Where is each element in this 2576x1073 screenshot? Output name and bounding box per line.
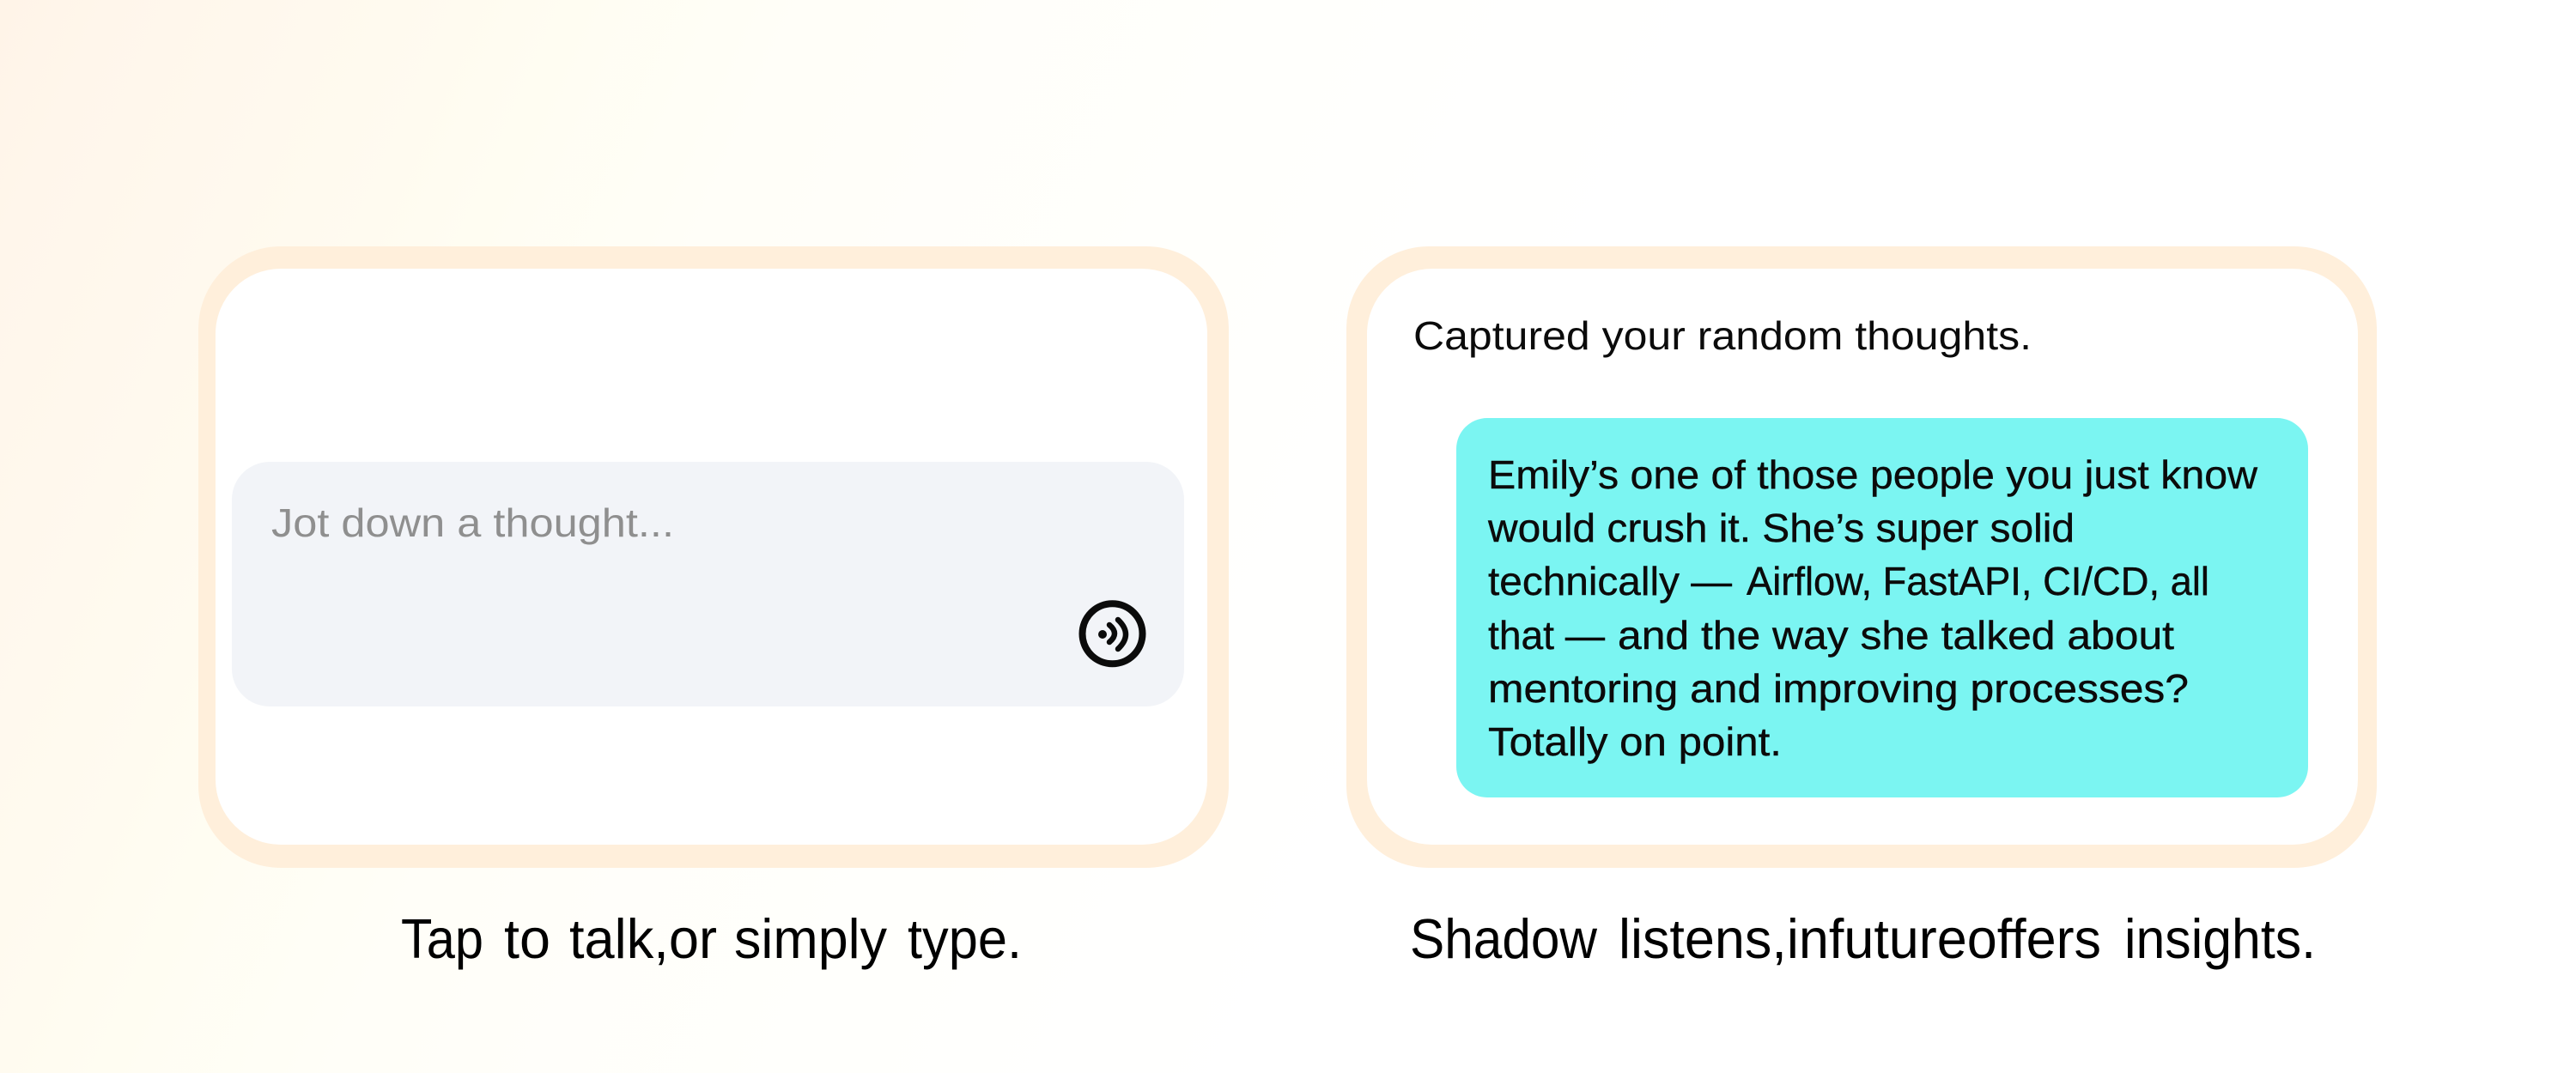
panel: transcript card [1346,246,2377,868]
input card frame [198,246,1229,868]
caption: input card: talk,or [569,907,717,970]
bubble background [1456,418,2308,797]
bubble text: and the way she talked about [1618,613,2174,658]
bubble text: Totally on point. [1488,719,1782,764]
bubble text [1487,452,2258,764]
transcript card frame [1346,246,2377,868]
caption: input card: simply [734,907,887,970]
bubble text: Emily’s one of those people you just know [1488,452,2258,497]
confirmation text: Captured your random thoughts. [1413,313,2032,358]
input field [232,462,1184,706]
caption: transcript card: Shadow [1410,907,1598,970]
bubble text: would crush it. She’s super solid [1487,506,2075,550]
bubble text: technically — [1488,559,1732,603]
transcript bubble [1456,418,2308,797]
caption: transcript card: insights. [2124,907,2316,970]
caption: transcript card: listens,infutureoffers [1619,907,2101,970]
panel: input card [198,246,1229,868]
bubble text: Airflow, FastAPI, CI/CD, all [1747,559,2209,603]
caption: input card: type. [908,907,1022,970]
caption: input card [401,907,1022,970]
input field background [232,462,1184,706]
input card interior [216,269,1207,845]
caption: input card: to [504,907,550,970]
placeholder text: Jot down a thought... [271,500,674,545]
bubble text: that — [1488,613,1605,658]
caption: transcript card [1410,907,2316,970]
transcript card interior [1367,269,2358,845]
icon: voice button [1082,603,1142,664]
caption: input card: Tap [401,907,483,970]
bubble text: mentoring and improving processes? [1488,666,2189,711]
